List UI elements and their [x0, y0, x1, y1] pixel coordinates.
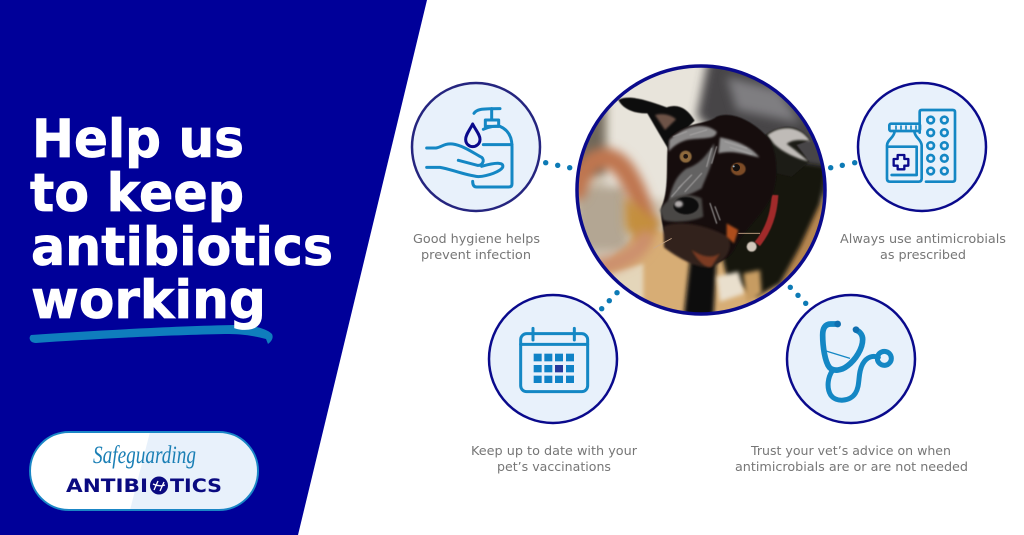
title: antibiotics	[31, 217, 333, 278]
text: medicines caption: as prescribed	[880, 248, 966, 262]
text: vet advice caption	[735, 444, 968, 474]
text: medicines caption	[840, 232, 1006, 262]
title: working	[31, 270, 266, 331]
connector dots: vet advice	[788, 285, 808, 306]
panel: calendar icon	[489, 295, 617, 423]
eyes	[680, 151, 692, 163]
panel: medicines icon	[858, 83, 986, 211]
logo: Safeguarding Antibiotics: ANTIBI	[66, 475, 148, 497]
panel: blue title background	[0, 0, 427, 535]
beard	[663, 223, 730, 267]
text: vaccinations caption: pet’s vaccinations	[497, 460, 611, 474]
central photo: dog	[575, 64, 827, 316]
text: vaccinations caption: Keep up to date with your	[471, 444, 637, 458]
text: hygiene caption	[413, 232, 540, 262]
text: hygiene caption: Good hygiene helps	[413, 232, 540, 246]
logo: Safeguarding Antibiotics	[30, 432, 258, 510]
panel: stethoscope icon	[787, 295, 915, 423]
dog body	[720, 160, 827, 297]
connector dots: vaccinations	[599, 290, 620, 311]
panel: hygiene icon	[412, 83, 540, 211]
underline swoosh	[30, 325, 273, 344]
text: vaccinations caption	[471, 444, 637, 474]
muzzle and nose	[660, 195, 703, 222]
title: to keep	[30, 163, 244, 224]
ear right	[765, 127, 811, 177]
text: medicines caption: Always use antimicrobials	[840, 232, 1006, 246]
text: hygiene caption: prevent infection	[421, 248, 531, 262]
title	[30, 109, 333, 331]
title: Help us	[32, 109, 244, 170]
logo: Safeguarding Antibiotics: Safeguarding	[93, 442, 196, 469]
connector dots: prescribed	[828, 160, 857, 170]
text: vet advice caption: antimicrobials are or are not needed	[735, 460, 968, 474]
ear left	[618, 98, 695, 152]
grey fur	[669, 126, 717, 152]
collar	[757, 195, 775, 244]
blurred hand	[577, 187, 627, 250]
connector dots: hygiene	[543, 160, 572, 170]
logo: Safeguarding Antibiotics: TICS	[170, 475, 222, 497]
text: vet advice caption: Trust your vet’s advice on when	[750, 444, 951, 458]
backdrop	[579, 106, 823, 288]
head	[661, 115, 776, 264]
